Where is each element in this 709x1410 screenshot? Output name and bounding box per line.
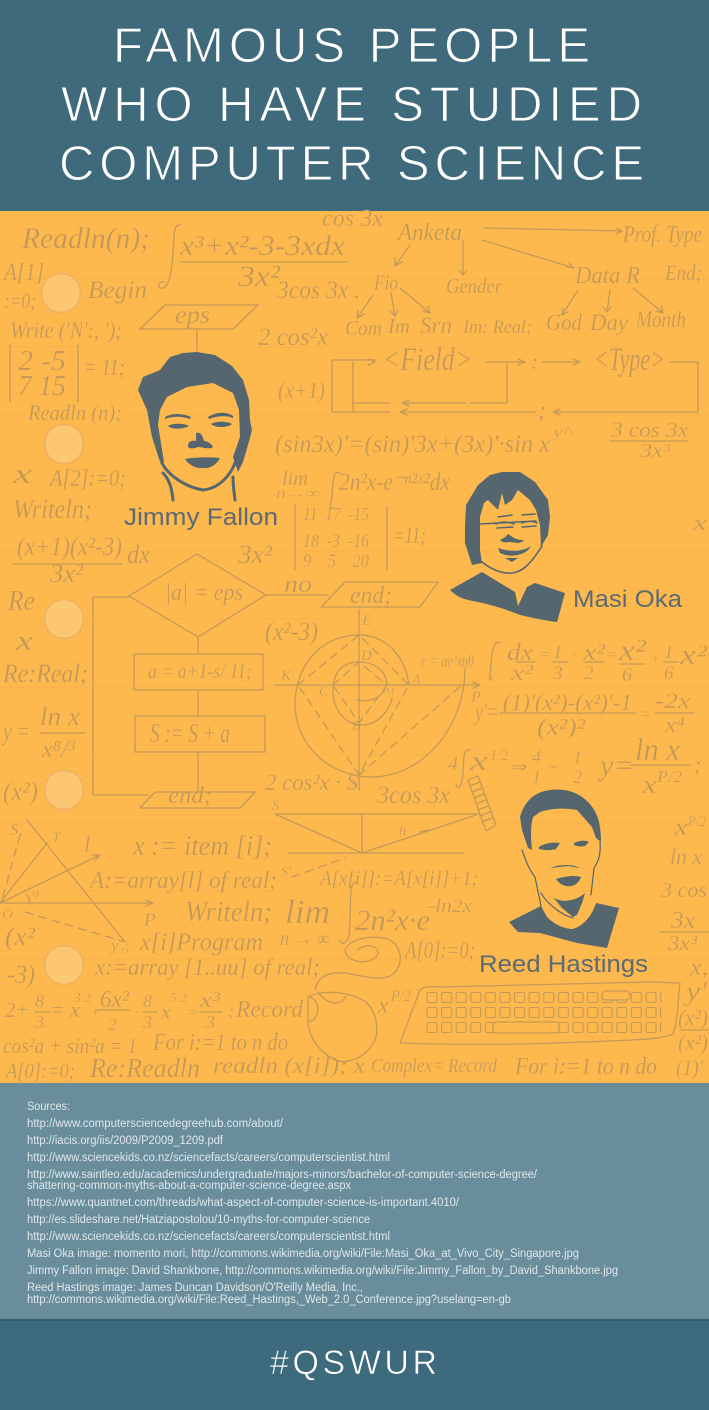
handwritten formulas: right equations: x² [510,660,534,685]
handwritten formulas: right equations: x [673,815,688,841]
title: COMPUTER SCIENCE [59,137,644,191]
handwritten formulas: integral and tree: (x+1) [278,378,325,403]
handwritten formulas: lower block: lim [285,894,330,931]
handwritten formulas: lower block: P [470,689,481,706]
handwritten formulas: left column: A[2]:=0; [48,466,126,492]
handwritten formulas: lower block: A:=array[l] of real; [88,868,277,894]
handwritten formulas: lower block [2,613,657,1083]
handwritten formulas: right equations: ~ [548,757,558,777]
handwritten formulas: flowchart labels: a = a+1-s/ 11; [148,659,252,683]
handwritten formulas: left column: (x+1)(x²-3) [17,532,122,561]
handwritten formulas: integral and tree: Gender [446,274,503,298]
handwritten formulas: right equations: r = ae^mθ [421,651,474,671]
handwritten formulas: lower block: ; [228,1001,234,1021]
title: WHO HAVE STUDIED [61,78,642,132]
handwritten formulas: left column: dx [127,540,150,569]
handwritten formulas: right equations: 1 [573,747,582,767]
handwritten formulas: lower block: h [399,824,406,839]
handwritten formulas: lower block: A[0]:=0; [4,1058,75,1083]
handwritten formulas: left column: (x²) [3,777,38,806]
handwritten formulas: right equations: x² [618,634,647,667]
handwritten formulas: flowchart labels: end; [350,583,392,609]
handwritten formulas: lower block: S [272,798,280,814]
handwritten formulas: lower block: S [350,776,357,791]
handwritten formulas: integral and tree: Data R [574,263,640,289]
sources list: Masi Oka image: momento mori, http://commons.wikimedia.org/wiki/File:Masi_Oka_at_Vivo_City_Singapore.jpg [27,1248,579,1260]
handwritten formulas: right equations: x [641,770,658,799]
handwritten formulas: right equations: 3 cos [660,878,707,902]
title: FAMOUS PEOPLE [113,19,590,73]
shirt [509,903,619,948]
sources list: http://iacis.org/iis/2009/P2009_1209.pdf [27,1135,224,1147]
handwritten formulas: integral and tree: eps [175,302,210,329]
handwritten formulas: right equations: + [650,651,660,667]
mouse [308,937,400,1061]
handwritten formulas: right equations: x⁴ [664,712,685,737]
handwritten formulas: lower block: 8 [143,991,152,1011]
ray diagram [275,776,496,853]
handwritten formulas: lower block: x [160,999,171,1024]
handwritten formulas: integral and tree: Srn [420,313,452,338]
handwritten formulas: integral and tree: : [531,349,538,374]
handwritten formulas: right equations [421,634,708,1080]
handwritten formulas: right equations: 3 [552,663,562,684]
handwritten formulas: right equations: ln x [670,844,702,869]
handwritten formulas: lower block: For i:=1 to n do [152,1030,288,1056]
handwritten formulas: lower block: φ [32,885,39,900]
diagram: arrows, flowchart, circle and rays [0,225,709,1061]
handwritten formulas: right equations: 2 [573,767,582,787]
handwritten formulas: lower block: E [361,613,371,629]
handwritten formulas: lower block: C [319,685,329,700]
handwritten formulas: right equations: 1 [664,642,674,663]
matrix bars [10,345,387,570]
handwritten formulas: lower block: · [134,1005,138,1021]
handwritten formulas: lower block: 2+ [5,997,29,1022]
handwritten formulas: left column: = 11; [84,355,125,381]
handwritten formulas: lower block: 3/2 [73,991,91,1006]
handwritten formulas: lower block: = [187,1005,197,1021]
handwritten formulas: integral and tree: End; [664,260,702,285]
handwritten formulas: integral and tree: y^ [550,424,574,441]
handwritten formulas: lower block: 5/2 [170,991,187,1006]
handwritten formulas: integral and tree: =11; [393,523,426,548]
handwritten formulas: right equations: ; [694,752,701,777]
handwritten formulas: left column: x⁸/³ [41,737,76,763]
handwritten formulas: lower block: readln (x[i]); x [213,1053,366,1078]
handwritten formulas: right equations: -2x [655,688,690,713]
sources list: http://es.slideshare.net/Hatziapostolou/10-myths-for-computer-science [27,1214,370,1226]
handwritten formulas: right equations: (x²)² [537,715,586,741]
sources list: http://www.sciencekids.co.nz/sciencefacts/careers/computerscientist.html [27,1231,390,1243]
handwritten formulas: lower block: y₁; [109,936,130,955]
handwritten formulas: right equations: x² [679,640,708,671]
facial features [522,842,600,918]
handwritten formulas: right equations: x, [689,955,708,981]
facial features [480,514,542,573]
handwritten formulas: integral and tree: <Field> [383,342,472,378]
handwritten formulas: lower block: Writeln; [185,897,272,928]
sources list: http://www.saintleo.edu/academics/undergraduate/majors-minors/bachelor-of-computer-science-degree/ [27,1169,538,1181]
flowchart [93,305,438,808]
handwritten formulas: lower block: For i:=1 to n do [514,1054,657,1080]
handwritten formulas: right equations: 6 [664,663,674,684]
hair [520,790,601,850]
handwritten formulas: right equations: ln x [635,731,680,767]
handwritten formulas: right equations: P/2 [656,767,683,786]
integral signs and fraction rules [13,225,709,1030]
handwritten formulas: integral and tree: cos 3x [322,206,383,232]
handwritten formulas: right equations: y' [682,976,708,1006]
handwritten formulas: left column: 3x² [237,540,273,569]
panel: notebook paper [0,206,709,1083]
handwritten formulas: lower block: O [2,907,13,923]
handwritten formulas: integral and tree: x [692,510,707,535]
handwritten formulas: right equations: = [640,704,652,724]
handwritten formulas: lower block: T [52,830,62,846]
hair and fringe [465,472,550,565]
handwritten formulas: left column: x [15,626,34,657]
handwritten formulas: left column: Begin [88,277,147,304]
handwritten formulas: integral and tree: Com [345,316,382,340]
handwritten formulas: right equations: (x²) [678,1030,708,1055]
handwritten formulas: lower block: -ln2x [428,896,473,917]
handwritten formulas: lower block: l [84,832,90,857]
hair [138,352,252,472]
handwritten formulas: integral and tree: 2n²x-e⁻ⁿ²ˣ²dx [339,469,450,496]
handwritten formulas: flowchart labels: S := S + a [150,718,230,748]
handwritten formulas: lower block: B [352,719,361,734]
handwritten formulas: integral and tree: 11 17 -15 [303,504,369,524]
handwritten formulas: lower block: 2 [108,1015,117,1034]
handwritten formulas: left column: -3) [7,960,35,989]
handwritten formulas: left column: x [11,459,33,490]
handwritten formulas: lower block: D [360,648,372,664]
handwritten formulas: lower block: 3 [142,1012,152,1032]
label: Jimmy Fallon: Jimmy Fallon [124,504,278,531]
handwritten formulas: flowchart labels: no [284,572,312,598]
sources list: Sources: [27,1101,70,1113]
handwritten formulas: right equations: 2 [584,663,594,684]
shirt [450,572,565,622]
label: Reed Hastings: Reed Hastings [479,951,648,978]
handwritten formulas: lower block: A[0]:=0; [403,938,475,964]
angle diagram [0,820,153,942]
portrait: Masi Oka [450,472,565,622]
handwritten formulas: integral and tree: lim [282,468,308,490]
handwritten formulas: right equations: x [469,746,489,777]
handwritten formulas: right equations: y= [597,749,634,782]
handwritten formulas: lower block: 6x² [100,987,130,1013]
sources list: http://www.computersciencedegreehub.com/about/ [27,1118,284,1130]
handwritten formulas: left column: Re:Real; [2,659,88,688]
handwritten formulas: integral and tree: 2 cos²x [258,324,328,351]
handwritten formulas: lower block: = x [50,997,80,1022]
handwritten formulas: lower block: Complex= Record [371,1055,498,1077]
handwritten formulas: lower block: A [411,673,421,688]
handwritten formulas: left column: 7 15 [18,371,66,402]
handwritten formulas: left column: 2 -5 [18,346,66,377]
handwritten formulas: left column: Re [7,586,35,617]
handwritten formulas: left column: A[1] [2,260,44,286]
handwritten formulas: left column: Readln (n); [27,400,122,425]
handwritten formulas: lower block: cos²a + sin²a = 1 [3,1033,137,1058]
handwritten formulas: integral and tree: 9 5 20 [303,551,369,572]
handwritten formulas: left column: Readln(n); [21,222,150,255]
facial features [165,413,233,468]
handwritten formulas: right equations: dx [507,640,533,666]
handwritten formulas: integral and tree: Im [387,314,410,338]
handwritten formulas: integral and tree: 18 -3 -16 [303,531,369,552]
header banner [0,0,709,211]
handwritten formulas: right equations: = [539,645,550,664]
paper holes [42,274,84,984]
handwritten formulas: right equations: 4 [532,747,541,767]
handwritten formulas: left column: Writeln; [13,494,92,524]
handwritten formulas: integral and tree: Fio [373,270,398,295]
tree arrows [357,228,663,318]
handwritten formulas: integral and tree: ; [538,398,546,424]
handwritten formulas: flowchart labels: |a| = eps [165,580,243,606]
handwritten formulas: right equations: x² [582,640,606,666]
handwritten formulas: right equations: 6 [622,664,632,686]
keyboard [400,982,680,1044]
handwritten formulas: integral and tree: x³+x²-3-3xdx [179,230,345,262]
sources list [27,1101,618,1306]
handwritten formulas: right equations: 3x³ [667,931,698,955]
handwritten formulas: lower block: + [90,1005,100,1021]
handwritten formulas: integral and tree [175,206,707,572]
handwritten formulas: integral and tree: n→∞ [276,486,320,502]
handwritten formulas: left column: :=0; [4,288,36,313]
handwritten formulas: lower block: 8 [35,991,44,1011]
sources list: Jimmy Fallon image: David Shankbone, http://commons.wikimedia.org/wiki/File:Jimmy_Fallon_by_David_Shankbone.jpg [27,1265,618,1277]
handwritten formulas: left column: (x² [5,922,36,951]
handwritten formulas: left column: ln x [40,702,80,731]
handwritten formulas: left column: Write ('N':, '); [10,318,122,343]
handwritten formulas: lower block: x[i]Program [139,929,263,956]
sources list: shattering-common-myths-about-a-computer-science-degree.aspx [27,1180,351,1192]
handwritten formulas: right equations: 4 [448,753,458,775]
handwritten formulas: lower block: 3 [205,1012,215,1032]
handwritten formulas: integral and tree: Im: Real; [462,317,532,338]
handwritten formulas: lower block: A[x[i]]:=A[x[i]]+1; [318,866,478,890]
sources list: http://www.sciencekids.co.nz/sciencefacts/careers/computerscientist.html [27,1152,390,1164]
handwritten formulas: integral and tree: God [546,310,582,335]
handwritten formulas: right equations: · [572,645,576,664]
sources list: http://commons.wikimedia.org/wiki/File:Reed_Hastings,_Web_2.0_Conference.jpg?uselang=en-gb [27,1294,511,1306]
handwritten formulas: left column [1,222,273,989]
portrait: Jimmy Fallon [138,352,252,500]
handwritten formulas: lower block: Record [235,997,304,1023]
handwritten formulas: integral and tree: Anketa [396,220,462,246]
handwritten formulas: left column: y = [1,717,30,746]
handwritten formulas: lower block: x³ [199,987,220,1012]
handwritten formulas: right equations: (1)'(x²)-(x²)'-1 [503,690,632,715]
jaw and neck [162,455,238,500]
handwritten formulas: flowchart labels: (x²-3) [265,617,318,646]
handwritten formulas: lower block: P/2 [390,988,411,1005]
handwritten formulas: integral and tree: Month [635,307,686,332]
label: Masi Oka: Masi Oka [573,586,683,613]
handwritten formulas: lower block: 2n²x·e [355,904,430,937]
handwritten formulas: right equations: P/2 [687,814,706,830]
handwritten formulas: lower block: 3 [34,1012,44,1032]
handwritten formulas: right equations: ⇒ [510,757,527,777]
handwritten formulas: integral and tree: 3 cos 3x [610,417,688,442]
handwritten formulas: lower block: S, [10,820,23,839]
handwritten formulas: lower block: x := item [i]; [132,830,272,862]
handwritten formulas: integral and tree: <Type> [594,342,665,378]
handwritten formulas: right equations: (x²) [678,1005,708,1030]
handwritten formulas: lower block: P [143,910,156,931]
handwritten formulas: right equations: (1)' [676,1055,703,1080]
syntax diagram [332,359,698,415]
handwritten formulas: flowchart labels: 2 cos²x · S [265,770,358,795]
handwritten formulas: integral and tree: 3x² [237,260,281,293]
handwritten formulas: right equations: = [606,645,617,664]
handwritten formulas: flowchart labels: end; [168,783,212,809]
title [59,19,644,191]
handwritten formulas: lower block: Re:Readln [89,1053,200,1083]
hashtag: #QSWUR [270,1344,437,1382]
handwritten formulas: lower block: x:=array [1..uu] of real; [94,955,320,981]
sources list: https://www.quantnet.com/threads/what-aspect-of-computer-science-is-important.4010/ [27,1197,460,1209]
handwritten formulas: lower block: x [377,993,389,1019]
handwritten formulas: integral and tree: 3x³ [639,440,671,462]
panel: sources [0,1083,709,1319]
handwritten formulas: left column: 3x² [49,559,84,588]
handwritten formulas: flowchart labels: 3cos 3x [376,782,450,809]
handwritten formulas: right equations: 3x [670,908,695,934]
portrait: Reed Hastings [509,790,619,948]
circle diagram [275,610,480,790]
handwritten formulas: integral and tree: Day [589,310,629,335]
handwritten formulas: right equations: 1 [532,767,541,787]
handwritten formulas: lower block: n → ∞ [280,928,330,950]
handwritten formulas: lower block: M [384,686,395,698]
handwritten formulas: right equations: 1 [553,642,562,663]
sources list: Reed Hastings image: James Duncan Davidson/O'Reilly Media, Inc., [27,1282,363,1294]
handwritten formulas: integral and tree: (sin3x)'=(sin)'3x+(3x)'·sin x [275,431,550,458]
handwritten formulas: flowchart labels [148,572,450,809]
handwritten formulas: right equations: 1/2 [490,747,508,764]
handwritten formulas: integral and tree: 3cos 3x . [276,277,360,304]
footer banner [0,1319,709,1410]
handwritten formulas: lower block: S' [281,865,292,880]
handwritten formulas: right equations: y'= [473,699,499,726]
handwritten formulas: lower block: K [280,668,292,684]
